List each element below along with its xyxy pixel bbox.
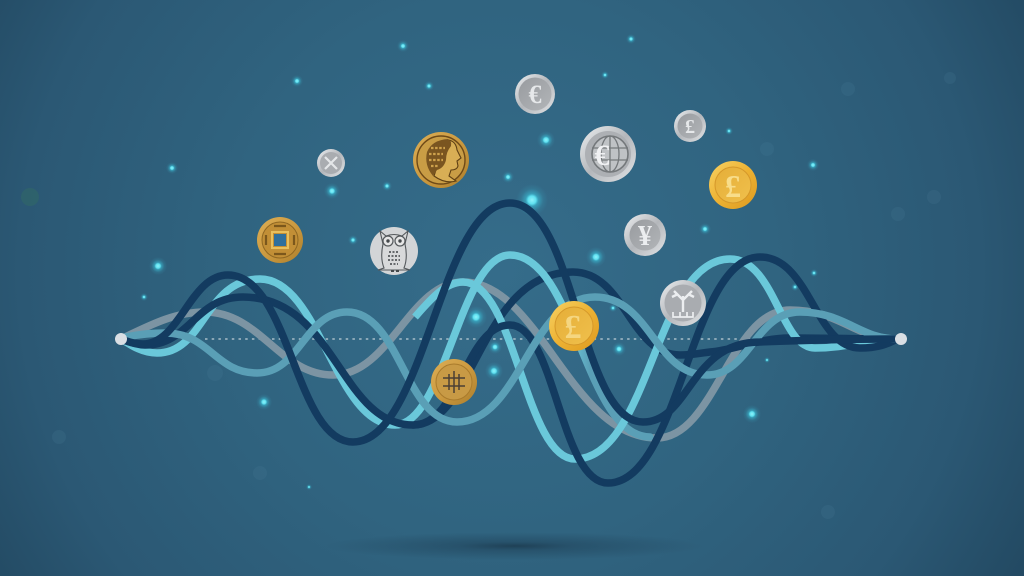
coin: silver tree — [660, 280, 706, 326]
coin: bronze cash coin — [257, 217, 303, 263]
coin: bronze cross — [431, 359, 477, 405]
coin: silver euro small: € — [528, 80, 542, 109]
coin: gold pound large: £ — [564, 309, 582, 346]
coin: silver owl — [370, 227, 418, 275]
wave: light cyan one — [121, 255, 650, 437]
right end node — [895, 333, 907, 345]
coin: gold pound upper — [709, 161, 757, 209]
wave: light cyan two — [415, 259, 897, 459]
coin: silver yen: ¥ — [638, 221, 652, 252]
ground shadow — [325, 532, 705, 560]
coin: silver globe euro: € — [594, 139, 610, 172]
wave: dark navy one — [121, 203, 897, 442]
coin: silver pound small: £ — [685, 116, 695, 138]
coin: silver euro small — [515, 74, 555, 114]
coin: gold classical head — [413, 132, 469, 188]
wave: gray — [121, 282, 897, 438]
left end node — [115, 333, 127, 345]
coin: silver globe euro — [580, 126, 636, 182]
coin: silver yen — [624, 214, 666, 256]
coin: silver cross small — [317, 149, 345, 177]
wave: dark navy two — [121, 257, 897, 483]
coin: gold pound upper: £ — [725, 168, 741, 204]
sparkles — [140, 34, 819, 490]
coin: silver pound small — [674, 110, 706, 142]
baseline: dotted line — [205, 338, 830, 340]
coin: gold pound large — [549, 301, 599, 351]
wave: medium teal — [121, 297, 897, 422]
dim node at left — [21, 188, 39, 206]
wave: dark navy three — [413, 272, 897, 425]
faint background bubbles — [52, 72, 956, 519]
